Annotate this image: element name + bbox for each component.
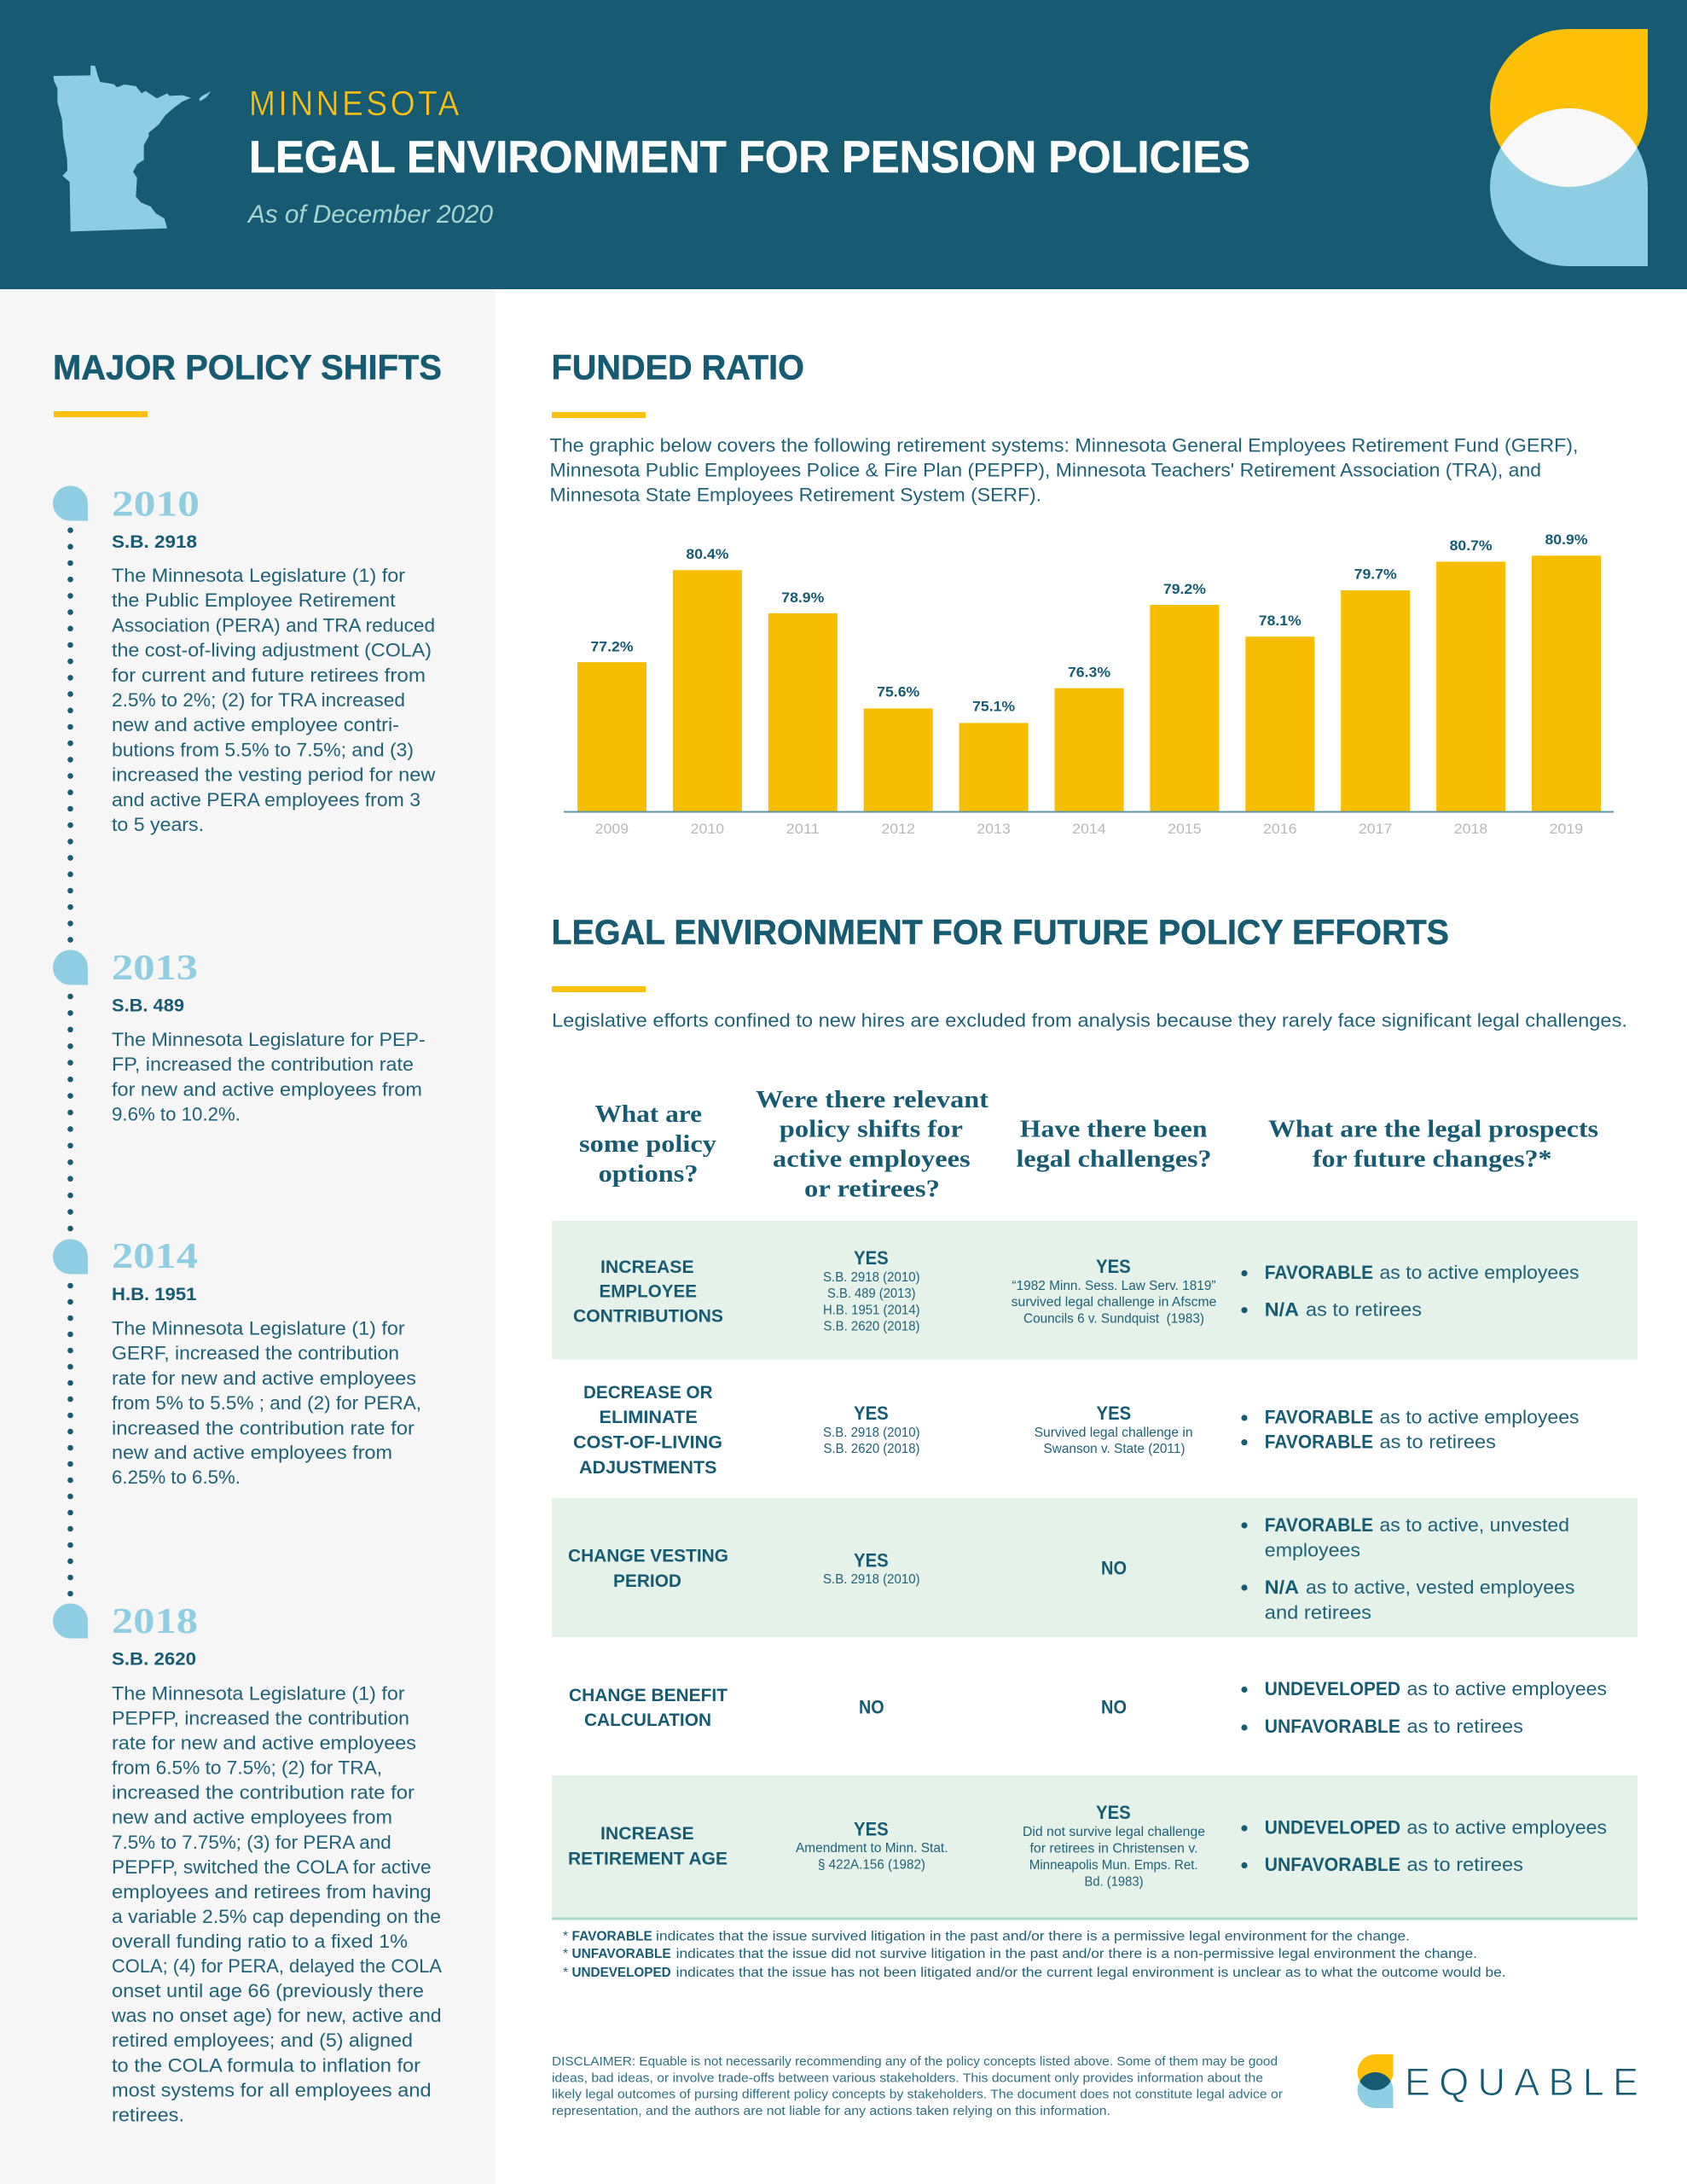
policy shifts cell: NO: [859, 1696, 884, 1717]
description 2018: 7.5% to 7.75%; (3) for PERA and: [112, 1832, 391, 1853]
funded ratio heading: FUNDED RATIO: [551, 348, 804, 387]
legal prospects cell: as to active, vested employees: [1306, 1577, 1574, 1598]
legal challenges cell: [1035, 1403, 1193, 1456]
table row: change benefit calculation: [569, 1678, 1607, 1737]
bill S.B. 2918: S.B. 2918: [112, 532, 197, 552]
bar chart: funded ratio 2009 to 2019: 2019: [1550, 821, 1583, 837]
bar chart: funded ratio 2009 to 2019: 2009: [595, 821, 629, 837]
description 2018: retired employees; and (5) aligned: [112, 2030, 413, 2051]
policy option: CONTRIBUTIONS: [573, 1307, 723, 1327]
table column headers: some policy: [579, 1131, 716, 1158]
description 2018: new and active employees from: [112, 1807, 392, 1828]
legal challenges cell: NO: [1101, 1558, 1127, 1578]
bar chart: funded ratio 2009 to 2019: 80.9%: [1545, 531, 1588, 548]
icon: Equable overlapping drops logo mark: [1490, 29, 1648, 266]
bar chart: funded ratio 2009 to 2019: 2015: [1168, 821, 1202, 837]
legal challenges cell: for retirees in Christensen v.: [1030, 1842, 1197, 1856]
policy shifts cell: S.B. 2918 (2010): [823, 1270, 920, 1285]
legal prospects cell: FAVORABLE: [1265, 1262, 1373, 1283]
description 2013: 9.6% to 10.2%.: [112, 1104, 241, 1125]
timeline entry: 2010: [53, 485, 436, 835]
bar chart: funded ratio 2009 to 2019: 2011: [786, 821, 820, 837]
description 2010: increased the vesting period for new: [112, 764, 436, 786]
description 2018: PEPFP, switched the COLA for active: [112, 1856, 432, 1878]
legal prospects cell: N/A: [1265, 1577, 1299, 1598]
legal prospects cell: FAVORABLE: [1265, 1514, 1373, 1536]
table footnotes: indicates that the issue has not been litigated and/or the current legal environment is unclear as to what the outcome would be.: [676, 1966, 1506, 1980]
description 2014: new and active employees from: [112, 1442, 392, 1463]
bar chart: funded ratio 2009 to 2019: [564, 531, 1614, 837]
disclaimer: ideas, bad ideas, or involve trade-offs between various stakeholders. This document only provides information about the: [552, 2071, 1263, 2085]
bar chart: funded ratio 2009 to 2019: 76.3%: [1068, 665, 1110, 681]
table row: decrease or eliminate cost-of-living adjustments: [573, 1383, 1580, 1478]
table column headers: or retirees?: [804, 1176, 940, 1203]
description 2018: from 6.5% to 7.5%; (2) for TRA,: [112, 1757, 382, 1779]
policy option: CHANGE BENEFIT: [569, 1686, 728, 1705]
legal prospects cell: FAVORABLE: [1265, 1432, 1373, 1452]
bar chart: funded ratio 2009 to 2019: 2016: [1263, 821, 1296, 837]
legal environment heading: LEGAL ENVIRONMENT FOR FUTURE POLICY EFFORTS: [551, 913, 1449, 952]
policy option: EMPLOYEE: [599, 1282, 697, 1302]
policy shifts cell: YES: [854, 1247, 889, 1269]
policy option: COST-OF-LIVING: [573, 1433, 722, 1452]
table column headers: options?: [599, 1161, 699, 1188]
policy option: [569, 1686, 728, 1730]
table row: increase retirement age: [552, 1775, 1638, 1920]
policy shifts cell: S.B. 2620 (2018): [824, 1320, 919, 1334]
bar chart: funded ratio 2009 to 2019: 80.4%: [686, 546, 728, 562]
legal challenges cell: survived legal challenge in Afscme: [1012, 1295, 1216, 1310]
legal prospects cell: [1241, 1817, 1607, 1875]
bar chart: funded ratio 2009 to 2019: 2012: [881, 821, 915, 837]
legal challenges cell: Swanson v. State (2011): [1044, 1442, 1186, 1456]
disclaimer: [552, 2054, 1283, 2118]
table column headers: [579, 1087, 1598, 1203]
funded ratio description: Minnesota Public Employees Police & Fire Plan (PEPFP), Minnesota Teachers' Retirement Association (TRA), and: [549, 460, 1541, 481]
bill S.B. 2620: S.B. 2620: [112, 1650, 196, 1670]
description 2010: new and active employee contri-: [112, 714, 399, 735]
description 2010: the cost-of-living adjustment (COLA): [112, 640, 432, 661]
header state name: MINNESOTA: [249, 84, 462, 123]
policy option: [573, 1383, 722, 1478]
disclaimer: representation, and the authors are not liable for any actions taken relying on this information.: [552, 2104, 1110, 2118]
Equable wordmark: EQUABLE: [1405, 2060, 1638, 2104]
header title: LEGAL ENVIRONMENT FOR PENSION POLICIES: [249, 132, 1250, 183]
timeline entry: 2018: [53, 1602, 442, 2125]
legal challenges cell: YES: [1097, 1403, 1131, 1424]
bar chart: funded ratio 2009 to 2019: 77.2%: [590, 638, 633, 655]
policy shifts cell: S.B. 489 (2013): [827, 1287, 916, 1301]
funded ratio description: The graphic below covers the following retirement systems: Minnesota General Employees Retirement Fund (GERF),: [549, 435, 1578, 456]
legal prospects cell: [1241, 1514, 1574, 1623]
policy shifts cell: [796, 1819, 948, 1872]
bar chart: funded ratio 2009 to 2019: 75.6%: [877, 684, 919, 700]
policy shifts cell: S.B. 2918 (2010): [823, 1426, 920, 1440]
policy shifts cell: § 422A.156 (1982): [818, 1858, 925, 1872]
legal challenges cell: YES: [1096, 1256, 1131, 1277]
table footnotes: FAVORABLE: [571, 1930, 652, 1943]
funded ratio description: [549, 435, 1578, 506]
table column headers: What are the legal prospects: [1268, 1116, 1598, 1143]
icon: timeline marker 2013: [53, 950, 88, 985]
panel: legal environment for future policy efforts: [551, 913, 1638, 1980]
description 2018: PEPFP, increased the contribution: [112, 1708, 409, 1728]
icon: timeline marker 2018: [53, 1603, 88, 1638]
description 2013: FP, increased the contribution rate: [112, 1054, 414, 1075]
description 2010: and active PERA employees from 3: [112, 789, 420, 810]
legal challenges cell: Survived legal challenge in: [1035, 1426, 1193, 1440]
sidebar heading: MAJOR POLICY SHIFTS: [53, 348, 442, 387]
year 2013: 2013: [112, 949, 198, 988]
legal prospects cell: employees: [1265, 1539, 1360, 1560]
panel: funded ratio: [549, 348, 1614, 837]
legal prospects cell: as to retirees: [1380, 1432, 1496, 1452]
table footnotes: indicates that the issue did not survive litigation in the past and/or there is a non-permissive legal environment the change.: [676, 1947, 1477, 1961]
heading accent bar: [552, 986, 646, 992]
policy shifts cell: S.B. 2918 (2010): [823, 1572, 920, 1587]
funded ratio description: Minnesota State Employees Retirement System (SERF).: [549, 485, 1041, 506]
legal challenges cell: NO: [1101, 1696, 1127, 1717]
table footnotes: *: [563, 1930, 568, 1943]
icon: timeline marker 2010: [53, 486, 88, 520]
description 2014: 6.25% to 6.5%.: [112, 1467, 241, 1488]
description 2010: Association (PERA) and TRA reduced: [112, 614, 435, 636]
legal prospects cell: as to active employees: [1407, 1817, 1607, 1838]
policy option: ELIMINATE: [599, 1408, 698, 1427]
timeline dots: [67, 531, 73, 1594]
description 2018: rate for new and active employees: [112, 1732, 416, 1754]
policy option: INCREASE: [600, 1258, 694, 1277]
icon: Equable logo mark: [1358, 2054, 1394, 2108]
policy option: CALCULATION: [584, 1711, 711, 1730]
description 2018: retirees.: [112, 2104, 184, 2125]
icon: Minnesota state map: [54, 66, 211, 231]
policy shifts cell: YES: [854, 1819, 889, 1839]
icon: timeline marker 2014: [53, 1239, 88, 1275]
bar chart: funded ratio 2009 to 2019: 2017: [1359, 821, 1392, 837]
table footnotes: [563, 1930, 1506, 1980]
policy shifts cell: Amendment to Minn. Stat.: [796, 1841, 948, 1856]
policy option: INCREASE: [600, 1824, 694, 1844]
bar chart: funded ratio 2009 to 2019: 2010: [691, 821, 724, 837]
legal challenges cell: Bd. (1983): [1085, 1875, 1143, 1890]
policy shifts cell: YES: [854, 1549, 889, 1571]
heading accent bar: [54, 411, 148, 417]
table column headers: active employees: [773, 1147, 971, 1172]
description 2010: The Minnesota Legislature (1) for: [112, 565, 405, 586]
description 2018: COLA; (4) for PERA, delayed the COLA: [112, 1955, 442, 1977]
disclaimer: DISCLAIMER: Equable is not necessarily recommending any of the policy concepts listed above. Some of them may be good: [552, 2054, 1278, 2069]
description 2014: increased the contribution rate for: [112, 1417, 415, 1438]
bill S.B. 489: S.B. 489: [112, 996, 184, 1015]
table column headers: Have there been: [1020, 1116, 1208, 1143]
table row: increase employee contributions: [552, 1221, 1638, 1360]
policy shifts cell: S.B. 2620 (2018): [824, 1442, 919, 1456]
legal challenges cell: [1023, 1802, 1205, 1890]
legal prospects cell: and retirees: [1265, 1602, 1371, 1623]
description 2014: from 5% to 5.5% ; and (2) for PERA,: [112, 1392, 421, 1414]
description 2018: The Minnesota Legislature (1) for: [112, 1682, 405, 1704]
policy option: CHANGE VESTING: [568, 1546, 728, 1566]
legal prospects cell: FAVORABLE: [1265, 1407, 1373, 1428]
header date: As of December 2020: [246, 200, 493, 229]
legal challenges cell: Did not survive legal challenge: [1023, 1825, 1205, 1839]
legal prospects cell: [1241, 1262, 1580, 1321]
table footnotes: *: [563, 1966, 568, 1980]
description 2018: employees and retirees from having: [112, 1881, 432, 1902]
bar chart: funded ratio 2009 to 2019: 78.9%: [781, 590, 824, 606]
legal challenges cell: “1982 Minn. Sess. Law Serv. 1819”: [1012, 1279, 1216, 1293]
description 2014: [112, 1318, 421, 1488]
policy option: DECREASE OR: [583, 1383, 713, 1403]
policy option: PERIOD: [613, 1571, 681, 1591]
description 2010: [112, 565, 436, 835]
year 2014: 2014: [112, 1237, 198, 1276]
description 2018: overall funding ratio to a fixed 1%: [112, 1931, 408, 1952]
legal challenges cell: YES: [1096, 1802, 1131, 1823]
legal prospects cell: N/A: [1265, 1298, 1299, 1321]
bar chart: funded ratio 2009 to 2019: 80.7%: [1450, 537, 1493, 554]
disclaimer: likely legal outcomes of pursing different policy concepts by stakeholders. The document does not constitute legal advice or: [552, 2087, 1283, 2102]
table footnotes: indicates that the issue survived litigation in the past and/or there is a permissive legal environment for the change.: [656, 1930, 1410, 1943]
legal challenges cell: Minneapolis Mun. Emps. Ret.: [1029, 1858, 1198, 1873]
legal prospects cell: as to active, unvested: [1380, 1514, 1569, 1536]
policy shifts cell: H.B. 1951 (2014): [823, 1303, 920, 1317]
description 2010: the Public Employee Retirement: [112, 590, 396, 611]
description 2013: for new and active employees from: [112, 1078, 422, 1101]
policy option: [568, 1546, 728, 1591]
legal prospects cell: as to active employees: [1380, 1407, 1580, 1428]
policy option: [573, 1258, 723, 1327]
description 2010: 2.5% to 2%; (2) for TRA increased: [112, 689, 405, 711]
legal prospects cell: as to retirees: [1407, 1854, 1523, 1875]
description 2010: butions from 5.5% to 7.5%; and (3): [112, 739, 414, 760]
description 2018: [111, 1682, 442, 2125]
table column headers: for future changes?*: [1313, 1147, 1552, 1172]
policy option: [568, 1824, 728, 1868]
table column headers: policy shifts for: [780, 1116, 963, 1143]
description 2018: to the COLA formula to inflation for: [112, 2054, 420, 2076]
table column headers: legal challenges?: [1017, 1147, 1211, 1172]
policy shifts cell: [823, 1247, 920, 1334]
legal challenges cell: [1012, 1256, 1216, 1327]
policy shifts cell: YES: [854, 1403, 889, 1424]
table column headers: What are: [594, 1101, 702, 1128]
description 2013: The Minnesota Legislature for PEP-: [112, 1029, 426, 1050]
bar chart: funded ratio 2009 to 2019: 79.2%: [1163, 581, 1206, 597]
description 2018: most systems for all employees and: [112, 2079, 432, 2100]
legal prospects cell: UNDEVELOPED: [1265, 1817, 1400, 1838]
legal prospects cell: as to active employees: [1407, 1678, 1607, 1699]
table row: change vesting period: [552, 1498, 1638, 1637]
table footnotes: *: [563, 1947, 568, 1961]
bar chart: funded ratio 2009 to 2019: 79.7%: [1354, 566, 1397, 582]
description 2018: onset until age 66 (previously there: [112, 1980, 424, 2001]
legal prospects cell: as to retirees: [1407, 1716, 1523, 1737]
timeline entry: 2014: [53, 1237, 421, 1488]
description 2010: for current and future retirees from: [112, 665, 426, 686]
bar chart: funded ratio 2009 to 2019: 2014: [1072, 821, 1106, 837]
legal prospects cell: [1241, 1407, 1580, 1452]
description 2018: a variable 2.5% cap depending on the: [112, 1906, 441, 1927]
panel: major policy shifts sidebar: [0, 289, 496, 2184]
description 2014: The Minnesota Legislature (1) for: [112, 1318, 405, 1339]
timeline entry: 2013: [53, 949, 426, 1125]
description 2014: rate for new and active employees: [112, 1368, 416, 1389]
legal prospects cell: UNFAVORABLE: [1265, 1716, 1400, 1737]
legal environment description: Legislative efforts confined to new hires are excluded from analysis because they rarely face significant legal challenges.: [552, 1009, 1627, 1031]
heading accent bar: [552, 412, 646, 418]
Equable logo: [1358, 2054, 1638, 2108]
description 2018: was no onset age) for new, active and: [111, 2005, 442, 2026]
description 2014: GERF, increased the contribution: [112, 1343, 399, 1364]
year 2010: 2010: [112, 485, 200, 524]
description 2013: [112, 1029, 426, 1125]
table column headers: Were there relevant: [756, 1087, 989, 1113]
table footnotes: UNFAVORABLE: [571, 1947, 671, 1961]
policy shifts cell: [823, 1549, 920, 1587]
bill H.B. 1951: H.B. 1951: [112, 1285, 197, 1304]
bar chart: funded ratio 2009 to 2019: 75.1%: [972, 698, 1015, 715]
policy option: ADJUSTMENTS: [579, 1458, 716, 1478]
description 2018: increased the contribution rate for: [112, 1782, 415, 1804]
legal prospects cell: [1241, 1678, 1607, 1737]
year 2018: 2018: [112, 1602, 198, 1641]
legal prospects cell: UNDEVELOPED: [1265, 1678, 1400, 1699]
table footnotes: UNDEVELOPED: [571, 1966, 671, 1980]
bar chart: funded ratio 2009 to 2019: 2013: [977, 821, 1011, 837]
legal prospects cell: as to active employees: [1380, 1262, 1580, 1283]
legal prospects cell: as to retirees: [1306, 1298, 1422, 1321]
bar chart: funded ratio 2009 to 2019: 2018: [1454, 821, 1487, 837]
bar chart: funded ratio 2009 to 2019: 78.1%: [1259, 613, 1301, 629]
legal prospects cell: UNFAVORABLE: [1265, 1854, 1400, 1875]
description 2010: to 5 years.: [112, 814, 204, 835]
header banner: [0, 0, 1687, 289]
policy shifts cell: [823, 1403, 920, 1456]
legal challenges cell: Councils 6 v. Sundquist (1983): [1023, 1312, 1204, 1327]
policy option: RETIREMENT AGE: [568, 1850, 728, 1868]
